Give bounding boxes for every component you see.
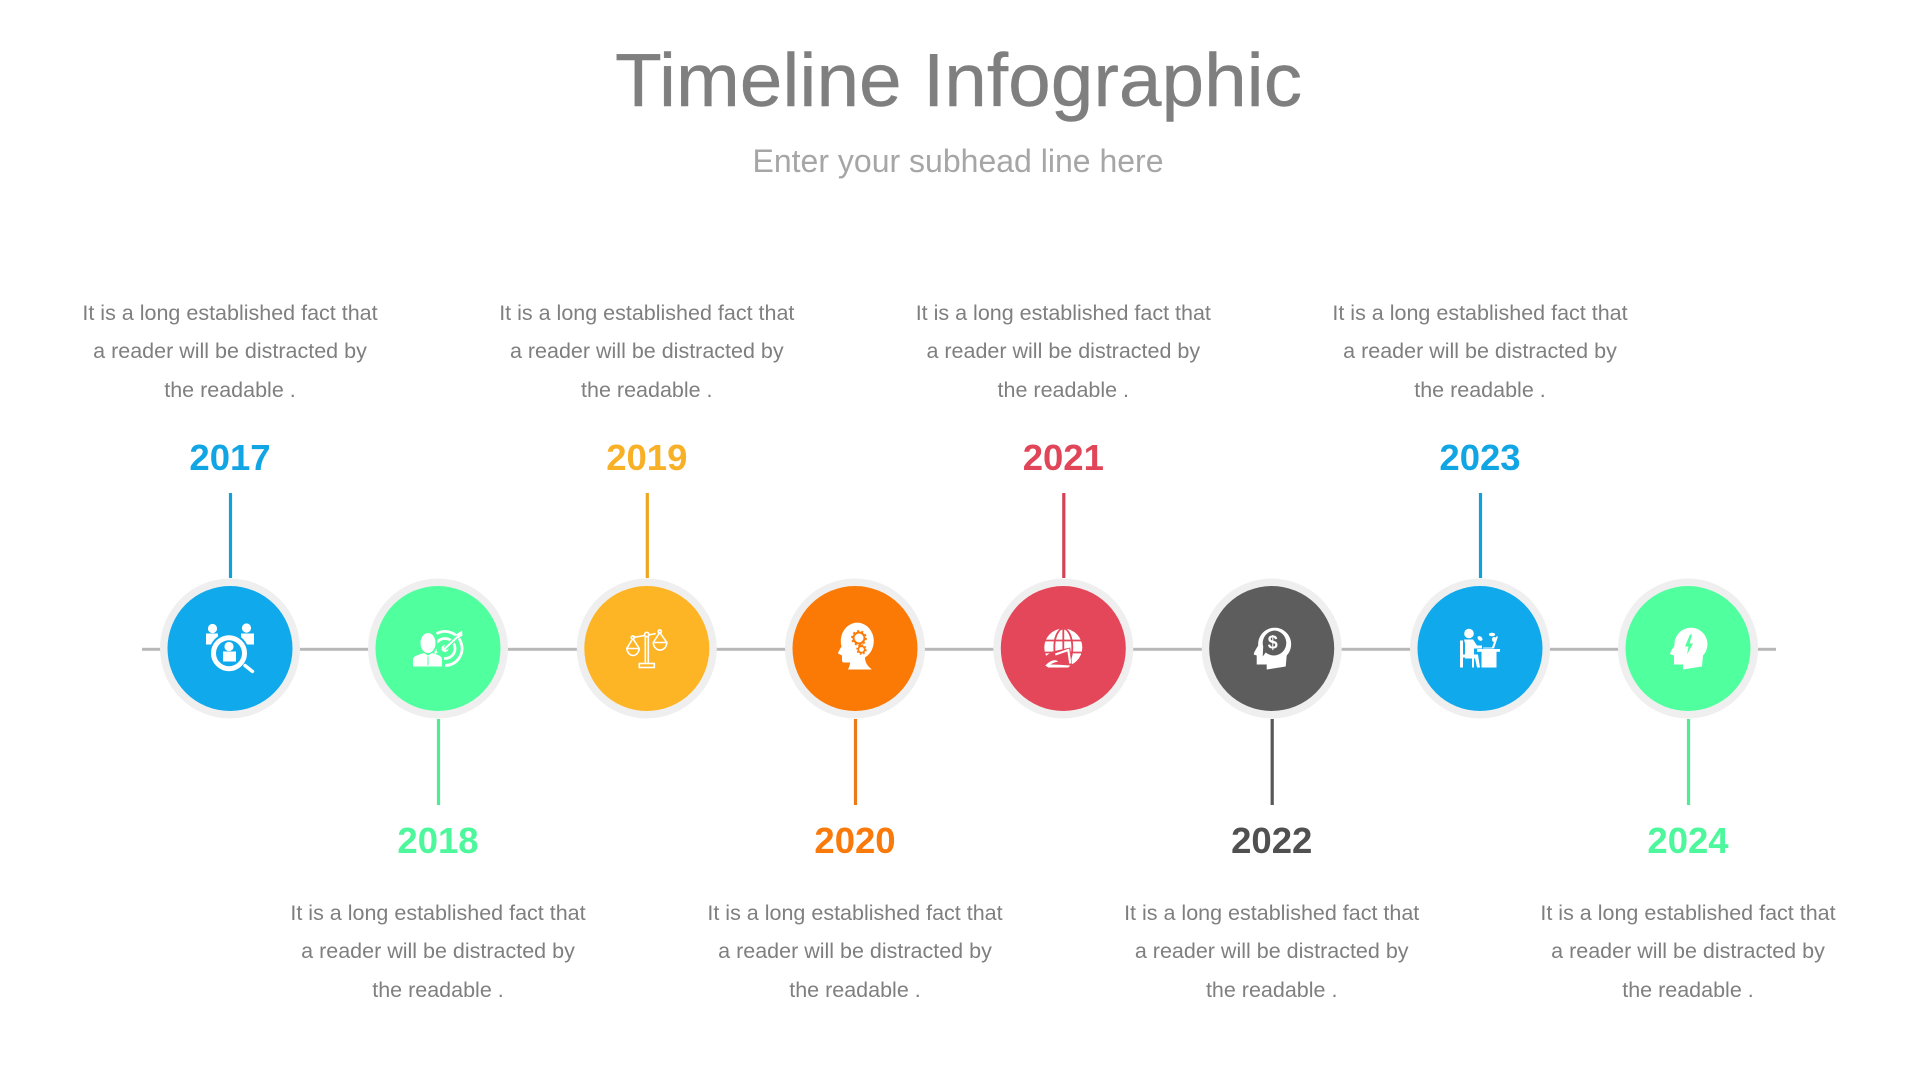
node ring 2018 <box>368 578 508 718</box>
description 2019: a reader will be distracted by <box>510 339 784 363</box>
connector 2018 <box>437 719 440 805</box>
year 2020: 2020 <box>814 820 896 861</box>
year 2024: 2024 <box>1647 820 1729 861</box>
description 2019: It is a long established fact that <box>499 301 794 325</box>
description 2017: a reader will be distracted by <box>93 339 367 363</box>
year 2023: 2023 <box>1439 437 1521 478</box>
description 2017: It is a long established fact that <box>82 301 378 325</box>
icon: head with gears <box>838 623 874 670</box>
disc 2018 <box>376 586 500 711</box>
icon: businessman and target <box>413 630 462 668</box>
node ring 2017 <box>160 578 300 718</box>
subhead: Enter your subhead line here <box>752 143 1164 179</box>
disc 2019 <box>584 586 709 711</box>
connector 2017 <box>229 493 232 578</box>
icon: head with dollar <box>1254 628 1291 670</box>
node ring 2019 <box>577 578 717 718</box>
node ring 2023 <box>1410 578 1550 718</box>
item 2024 <box>1540 578 1836 1002</box>
connector 2023 <box>1479 493 1482 578</box>
year 2022: 2022 <box>1231 820 1312 861</box>
description 2019: the readable . <box>581 378 713 402</box>
title: Timeline Infographic <box>615 38 1302 122</box>
connector 2022 <box>1271 719 1274 805</box>
node ring 2021 <box>993 578 1133 718</box>
item 2019 <box>499 301 794 718</box>
icon: head with dollar: $ <box>1268 632 1278 652</box>
description 2020: It is a long established fact that <box>707 901 1003 925</box>
item 2022 <box>1124 578 1419 1002</box>
description 2024: It is a long established fact that <box>1540 901 1836 925</box>
disc 2021 <box>1001 586 1126 711</box>
year 2021: 2021 <box>1023 437 1104 478</box>
description 2020: a reader will be distracted by <box>718 939 992 963</box>
connector 2019 <box>646 493 649 578</box>
icon: balance scales <box>627 630 667 668</box>
year 2019: 2019 <box>606 437 687 478</box>
description 2018: It is a long established fact that <box>290 901 586 925</box>
description 2023: the readable . <box>1414 378 1546 402</box>
icon: people under magnifier <box>206 623 254 673</box>
item 2020 <box>707 578 1003 1002</box>
connector 2020 <box>854 719 857 805</box>
description 2023: a reader will be distracted by <box>1343 339 1617 363</box>
icon: head with lightning bolt <box>1670 628 1707 670</box>
disc 2017 <box>168 586 292 711</box>
description 2024: a reader will be distracted by <box>1551 939 1825 963</box>
year 2018: 2018 <box>397 820 479 861</box>
description 2018: the readable . <box>372 978 504 1002</box>
description 2022: the readable . <box>1206 978 1337 1002</box>
item 2023 <box>1332 301 1628 718</box>
node ring 2022 <box>1202 578 1342 718</box>
description 2022: It is a long established fact that <box>1124 901 1419 925</box>
icon: person at desk <box>1460 629 1500 668</box>
icon: globe with hand <box>1042 628 1082 668</box>
description 2024: the readable . <box>1622 978 1754 1002</box>
item 2021 <box>916 301 1211 718</box>
year 2017: 2017 <box>189 437 271 478</box>
description 2020: the readable . <box>789 978 921 1002</box>
description 2021: It is a long established fact that <box>916 301 1211 325</box>
description 2022: a reader will be distracted by <box>1135 939 1409 963</box>
timeline axis <box>142 648 1776 651</box>
connector 2021 <box>1062 493 1065 578</box>
disc 2020 <box>792 586 918 711</box>
description 2023: It is a long established fact that <box>1332 301 1628 325</box>
node ring 2020 <box>785 578 925 718</box>
disc 2024 <box>1626 586 1750 711</box>
disc 2023 <box>1418 586 1542 711</box>
description 2018: a reader will be distracted by <box>301 939 575 963</box>
item 2018 <box>290 578 586 1002</box>
description 2021: a reader will be distracted by <box>926 339 1200 363</box>
node ring 2024 <box>1618 578 1758 718</box>
connector 2024 <box>1687 719 1690 805</box>
disc 2022 <box>1209 586 1334 711</box>
description 2021: the readable . <box>998 378 1129 402</box>
item 2017 <box>82 301 378 718</box>
description 2017: the readable . <box>164 378 296 402</box>
